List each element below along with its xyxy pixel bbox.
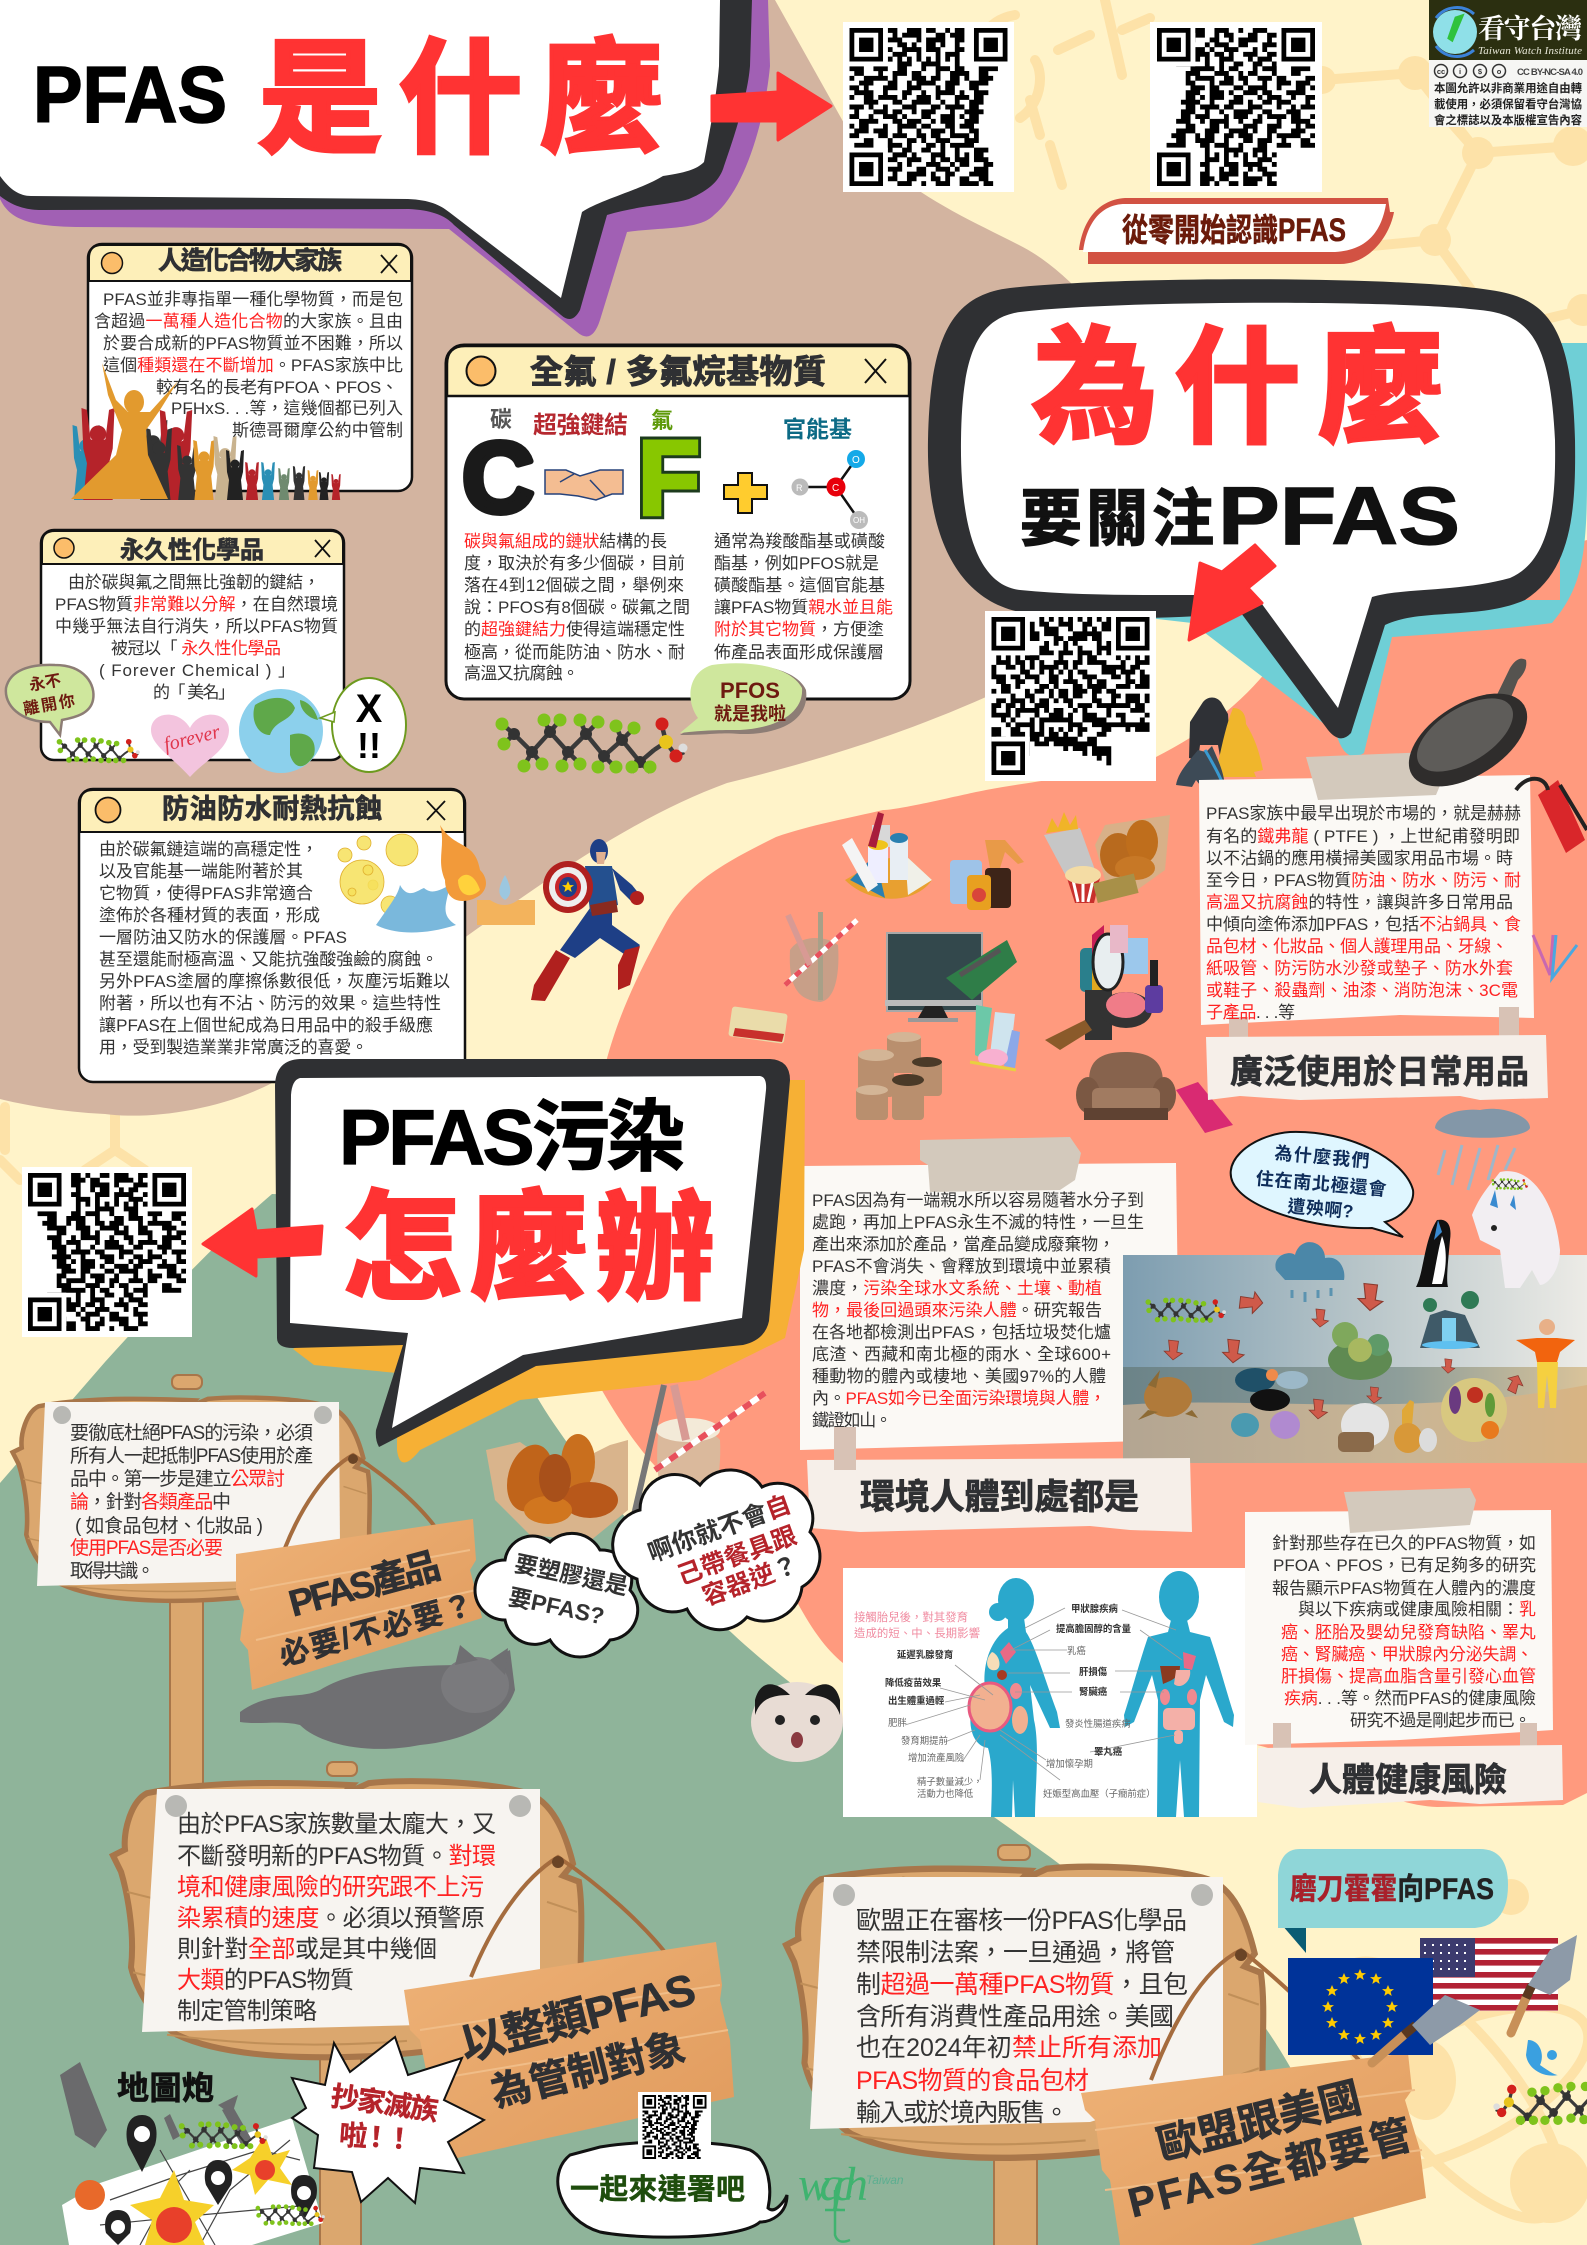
- paper body text: 與以下疾病或健康風險相關：乳: [1298, 1600, 1536, 1619]
- sign body text: 含所有消費性產品用途。美國: [856, 2003, 1174, 2031]
- left column text: 落在4到12個碳之間，舉例來: [464, 576, 684, 595]
- speech bubble: 為什麼 要關注PFAS: [928, 279, 1587, 756]
- diagram: carbon fluorine bond: [462, 407, 868, 537]
- label: 地圖炮: 地圖炮: [117, 2070, 214, 2106]
- right column text: 讓PFAS物質親水並且能: [714, 597, 893, 617]
- sign body text: [70, 1422, 313, 1582]
- label: 廣泛使用於日常用品: [1206, 1035, 1548, 1100]
- sign body text: 使用PFAS是否必要: [70, 1537, 223, 1559]
- sign: 要徹底杜絕: [13, 1398, 371, 1601]
- starburst: 抄家滅族啦: [292, 2037, 484, 2203]
- human body health figure: 肝損傷: [1079, 1666, 1108, 1677]
- sign: 歐盟正在審核: [786, 1867, 1265, 2158]
- speech bubble: 永不離開你: [6, 665, 93, 735]
- paper body text: 有名的鐵弗龍 ( PTFE ) ，上世紀甫發明即: [1206, 827, 1520, 846]
- figure labels: 造成的短、中、長期影響: [854, 1626, 980, 1640]
- icon: sofa: [1076, 1052, 1176, 1120]
- signpost: third post: [994, 1845, 1037, 2245]
- paper body text: 子產品. . .等: [1206, 1003, 1295, 1022]
- map with bombs: [60, 2062, 325, 2245]
- logo: Taiwan Watch Institute with licence: 本圖允許以非商業用途自由轉: [1434, 81, 1583, 95]
- thought cloud: 要塑膠還是要PFAS: 要PFAS?: [506, 1584, 607, 1629]
- panel body text: 由於碳與氟之間無比強韌的鍵結，: [68, 573, 320, 592]
- speech bubble: 永不離開你: 離開你: [22, 692, 76, 718]
- hanging sign: 歐盟跟美國PFAS全都要管: PFAS全都要管: [1123, 2112, 1416, 2226]
- icon: molecule: [1145, 1298, 1226, 1323]
- paper body text: 內。PFAS如今已全面污染環境與人體，: [812, 1389, 1106, 1408]
- paper body text: PFAS家族中最早出現於市場的，就是赫赫: [1206, 804, 1521, 823]
- arrow: to third QR: [1189, 545, 1275, 640]
- panel body text: [94, 290, 403, 440]
- paper body text: 種動物的體內或棲地、美國97%的人體: [812, 1367, 1106, 1386]
- icon: forever heart: forever: [162, 721, 222, 756]
- speech bubble: 為什麼我們住在南北極還會遭殃啊: 住在南北極還會: [1255, 1167, 1387, 1200]
- panel body text: PFAS物質非常難以分解，在自然環境: [55, 595, 338, 614]
- icon: rain cloud: [1435, 1109, 1530, 1190]
- icon: small molecule: [57, 737, 140, 763]
- icon: rain gear and shoes: [1176, 698, 1263, 787]
- speech bubble: X!!: !!: [357, 725, 381, 766]
- panel body text: 被冠以「 永久性化學品: [111, 639, 281, 658]
- sign body text: 境和健康風險的研究跟不上污: [177, 1874, 484, 1901]
- human body health figure: 肥胖: [888, 1717, 907, 1728]
- sign body text: 品中。第一步是建立公眾討: [70, 1468, 285, 1490]
- panel body text: PFAS並非專指單一種化學物質，而是包: [103, 290, 403, 309]
- speech bubble: PFAS 是什麼: [0, 0, 770, 336]
- sign body text: 所有人一起抵制PFAS使用於產: [70, 1445, 313, 1467]
- human body health figure: 甲狀腺疾病: [1071, 1603, 1119, 1614]
- title: 是什麼: [258, 31, 663, 169]
- speech bubble: 為什麼我們住在南北極還會遭殃啊: [1231, 1132, 1413, 1237]
- logo: Taiwan Watch Institute with licence: CC BY-NC-SA 4.0: [1517, 67, 1583, 78]
- left column text: 說：PFOS有8個碳。碳氟之間: [464, 598, 690, 617]
- logo: watch Taiwan: [798, 2158, 904, 2242]
- human body health figure: 出生體重過輕: [888, 1695, 945, 1706]
- starburst: 抄家滅族啦: 啦！！: [338, 2118, 414, 2156]
- paper body text: 疾病. . .等。然而PFAS的健康風險: [1284, 1689, 1536, 1708]
- paper body text: 癌、腎臟癌、甲狀腺內分泌失調、: [1281, 1645, 1533, 1664]
- sign body text: [177, 1811, 496, 2025]
- human body health figure: 妊娠型高血壓（子癇前症）: [1043, 1788, 1156, 1799]
- logo: Taiwan Watch Institute with licence: 看守台灣: [1478, 7, 1583, 46]
- sign body text: PFAS物質的食品包材: [856, 2067, 1089, 2095]
- diagram: carbon fluorine bond: 碳: [490, 407, 512, 432]
- icon: Captain America: [531, 839, 644, 1001]
- sign body text: [856, 1907, 1188, 2127]
- sign body text: 染累積的速度。必須以預警原: [177, 1905, 485, 1932]
- paper body text: 針對那些存在已久的PFAS物質，如: [1272, 1534, 1536, 1553]
- icon: sea creatures: [1231, 1368, 1308, 1439]
- label: 從零開始認識PFAS: 從零開始認識PFAS: [1122, 212, 1346, 248]
- QR code 4: [22, 1167, 192, 1337]
- heading: PFAS: [1218, 471, 1460, 562]
- diagram: carbon fluorine bond: O: [852, 455, 860, 466]
- heading: 要關注: [1020, 485, 1214, 554]
- hanging sign: PFAS產品必要/不必要: 必要/不必要？: [276, 1589, 477, 1672]
- right column text: 佈產品表面形成保護層: [714, 643, 884, 662]
- panel body text: 它物質，使得PFAS非常適合: [99, 883, 313, 903]
- label: 人體健康風險: 人體健康風險: [1309, 1761, 1507, 1798]
- speech bubble: 磨刀霍霍向PFAS: [1278, 1849, 1508, 1953]
- leader lines: [905, 1608, 1182, 1780]
- icon: earth: [239, 689, 323, 773]
- icon: forever heart: [151, 715, 229, 777]
- figure: pregnant woman: [969, 1578, 1060, 1817]
- sign body text: 禁限制法案，一旦通過，將管: [856, 1939, 1175, 1967]
- panel body text: 由於碳氟鏈這端的高穩定性，: [99, 839, 318, 859]
- hanging sign: PFAS產品必要/不必要: PFAS產品: [284, 1545, 445, 1624]
- speech bubble: PFAS污染 怎麼辦: [275, 1059, 805, 1462]
- icon: fire extinguisher: [1516, 779, 1587, 853]
- logo: Taiwan Watch Institute with licence: $: [1478, 67, 1483, 76]
- human body health figure: 睪丸癌: [1094, 1746, 1123, 1757]
- human body health figure: 腎臟癌: [1079, 1686, 1108, 1697]
- icon: meme cat: [751, 1682, 843, 1762]
- hanging sign: PFAS產品必要/不必要: [236, 1454, 482, 1690]
- speech bubble: PFOS 就是我啦: [680, 663, 806, 735]
- diagram: carbon fluorine bond: R: [796, 483, 803, 493]
- icon: PFOS molecule: [496, 714, 688, 774]
- signpost: second post: [320, 1762, 361, 2245]
- human body health figure: 乳癌: [1067, 1645, 1086, 1656]
- icon: bubble tea: [785, 912, 857, 1002]
- panel body text: 以及官能基一端能附著於其: [99, 862, 303, 881]
- paper body text: [1206, 804, 1521, 1022]
- paper body text: PFOA、PFOS，已有足夠多的研究: [1273, 1556, 1536, 1575]
- icon: tree island: [1328, 1322, 1392, 1380]
- icon: spray bottles: [950, 840, 1024, 910]
- paper body text: 至今日，PFAS物質防油、防水、防污、耐: [1206, 871, 1521, 890]
- paper body text: PFAS因為有一端親水所以容易隨著水分子到: [812, 1191, 1144, 1210]
- icon: frying pan: [1393, 659, 1543, 806]
- logo: Taiwan Watch Institute with licence: [1429, 0, 1587, 127]
- panel: 防油防水耐熱抗蝕: [79, 789, 465, 1082]
- diagram: carbon fluorine bond: C: [832, 483, 839, 494]
- QR code 3: [985, 611, 1156, 781]
- icon: fast food: [1044, 812, 1170, 903]
- paper body text: 產出來添加於產品，當產品變成廢棄物，: [812, 1235, 1115, 1254]
- arrow: to fourth QR: [203, 1209, 322, 1276]
- panel body text: 於要合成新的PFAS物質並不困難，所以: [103, 334, 403, 353]
- icon: waterfall rocks: [1420, 1291, 1480, 1349]
- thought cloud: 啊你就不會自己帶餐具跟容器逆: 啊你就不會自: [644, 1490, 795, 1568]
- icon: land animals: [1338, 1400, 1437, 1453]
- icon group: everyday products: [728, 812, 1233, 1133]
- icon: bombs: [60, 2062, 252, 2148]
- label: 環境人體到處都是: 環境人體到處都是: [860, 1478, 1139, 1517]
- panel heading: 人造化合物大家族: [158, 247, 342, 275]
- QR code 2: [1150, 22, 1322, 192]
- icon: vegetable circle: [1441, 1378, 1507, 1442]
- speech bubble: 為什麼我們住在南北極還會遭殃啊: 遭殃啊?: [1287, 1196, 1354, 1222]
- icon: EU flag: [1288, 1958, 1433, 2055]
- logo: Taiwan Watch Institute with licence: 載使用，必須保留看守台灣協: [1434, 97, 1582, 111]
- paper body text: 或鞋子、殺蟲劑、油漆、消防泡沫、3C電: [1206, 981, 1518, 1000]
- sign body text: 取得共識。: [70, 1560, 155, 1582]
- icon: woman shrugging: [1516, 1319, 1575, 1408]
- paper body text: 物，最後回過頭來污染人體。研究報告: [812, 1301, 1102, 1320]
- thought cloud: 要塑膠還是要PFAS: 要塑膠還是: [512, 1550, 630, 1600]
- speech bubble: 磨刀霍霍向PFAS: 磨刀霍霍向PFAS: [1290, 1873, 1494, 1906]
- logo: watch Taiwan: Taiwan: [866, 2173, 904, 2187]
- speech bubble: PFOS 就是我啦: PFOS: [720, 678, 780, 703]
- icon: water droplets: [1526, 2040, 1558, 2076]
- icon: turtle: [1138, 1370, 1198, 1420]
- panel body text: [55, 573, 338, 702]
- human body health figure: 發炎性腸道疾病: [1065, 1718, 1131, 1729]
- sign body text: 制超過一萬種PFAS物質，且包: [856, 1971, 1188, 1999]
- paper body text: 底渣、西藏和南北極的雨水、全球600+: [812, 1345, 1111, 1364]
- human body health figure: 精子數量減少，: [917, 1776, 983, 1787]
- icon: flow arrows: [1164, 1284, 1526, 1419]
- sign body text: 由於PFAS家族數量太龐大，又: [177, 1811, 496, 1838]
- panel body text: 讓PFAS在上個世紀成為日用品中的殺手級應: [99, 1015, 433, 1035]
- panel body text: 一層防油又防水的保護層。PFAS: [99, 928, 347, 947]
- panel body text: ( Forever Chemical ) 」: [99, 661, 295, 680]
- figure labels: 接觸胎兒後，對其發育: [854, 1610, 968, 1624]
- hanging sign: 以整類PFAS為管制對象: 為管制對象: [487, 2025, 690, 2116]
- heading: PFAS污染: [339, 1093, 685, 1181]
- sign body text: 輸入或於境內販售。: [856, 2099, 1069, 2127]
- right column text: [714, 532, 893, 662]
- right column text: 酯基，例如PFOS就是: [714, 554, 879, 573]
- icon: fire and brick: [440, 825, 535, 925]
- panel: 全氟/多氟烷基物質: [446, 345, 910, 699]
- panel body text: PFHxS. . .等，這幾個都已列入: [171, 398, 403, 418]
- logo: Taiwan Watch Institute with licence: cc: [1437, 67, 1445, 76]
- panel body text: 含超過一萬種人造化合物的大家族。且由: [94, 312, 403, 331]
- paper body text: [812, 1191, 1144, 1430]
- sign body text: 則針對全部或是其中幾個: [177, 1936, 437, 1963]
- heading: 怎麼辦: [343, 1183, 714, 1315]
- paper: PFAS in products: [1199, 752, 1534, 1045]
- sign body text: 大類的PFAS物質: [177, 1967, 354, 1994]
- paper body text: 中傾向塗佈添加PFAS，包括不沾鍋具、食: [1206, 915, 1521, 934]
- paper body text: 肝損傷、提高血脂含量引發心血管: [1281, 1667, 1536, 1686]
- panel: 永久性化學品: [41, 530, 344, 760]
- icon: map pins: [105, 2115, 317, 2245]
- label: 從零開始認識PFAS: [1079, 198, 1394, 264]
- diagram: carbon fluorine bond: OH: [853, 516, 865, 525]
- left column text: [464, 532, 690, 683]
- human body health figure: 增加流產風險: [908, 1752, 965, 1763]
- icon: blue cloud and drops: [1275, 1242, 1344, 1302]
- icon: cosmetic tubes: [970, 1005, 1020, 1070]
- starburst: 抄家滅族啦: 抄家滅族: [329, 2081, 440, 2126]
- label: 廣泛使用於日常用品: 廣泛使用於日常用品: [1230, 1053, 1529, 1090]
- human body health figure: 降低疫苗效果: [885, 1677, 942, 1688]
- figure: man: [1124, 1571, 1234, 1817]
- label: 人體健康風險: [1258, 1745, 1563, 1808]
- thought cloud: 啊你就不會自己帶餐具跟容器逆: 容器逆？: [698, 1550, 802, 1611]
- paper body text: 紙吸管、防污防水沙發或墊子、防水外套: [1206, 959, 1513, 978]
- figure labels: [854, 1610, 980, 1640]
- right column text: 通常為羧酸酯基或磺酸: [714, 532, 885, 551]
- hanging sign: 歐盟跟美國PFAS全都要管: 歐盟跟美國: [1153, 2074, 1366, 2169]
- panel body text: 用，受到製造業業非常廣泛的喜愛。: [99, 1038, 368, 1057]
- icon: gray cat lying: [240, 1645, 515, 1749]
- icon: cosmetics: [1045, 925, 1163, 1050]
- panel body text: [99, 839, 450, 1057]
- title: PFAS: [33, 50, 227, 139]
- panel body text: 中幾乎無法自行消失，所以PFAS物質: [55, 617, 338, 636]
- thought cloud: 啊你就不會自己帶餐具跟容器逆: 己帶餐具跟: [673, 1521, 801, 1591]
- QR code 5: [638, 2092, 711, 2162]
- left column text: 極高，從而能防油、防水、耐: [464, 643, 685, 662]
- panel body text: 另外PFAS塗層的摩擦係數很低，灰塵污垢難以: [99, 971, 450, 991]
- sign body text: 制定管制策略: [177, 1998, 317, 2025]
- paper body text: 高溫又抗腐蝕的特性，讓與許多日常用品: [1206, 892, 1513, 912]
- right column text: 磺酸酯基。這個官能基: [714, 575, 885, 595]
- diagram: carbon fluorine bond: 氟: [651, 408, 673, 433]
- icon: fried chicken: [486, 1434, 628, 1541]
- icon: molecule bottom right: [1493, 2082, 1587, 2125]
- thought cloud: 啊你就不會自己帶餐具跟容器逆: [613, 1470, 820, 1630]
- sign body text: 歐盟正在審核一份PFAS化學品: [856, 1907, 1187, 1935]
- sign body text: ( 如食品包材、化妝品 ): [75, 1515, 263, 1537]
- panel heading: 永久性化學品: [120, 537, 264, 564]
- logo: Taiwan Watch Institute with licence: Taiwan Watch Institute: [1478, 45, 1582, 57]
- paper: PFAS in environment: [800, 1137, 1180, 1450]
- label: 環境人體到處都是: [807, 1427, 1192, 1532]
- icon: dental floss picks: [1533, 935, 1577, 978]
- paper body text: PFAS不會消失、會釋放到環境中並累積: [812, 1257, 1111, 1276]
- hanging sign: 以整類PFAS為管制對象: [404, 1856, 734, 2160]
- panel body text: 附著，所以也有不沾、防污的效果。這些特性: [99, 993, 441, 1013]
- paper body text: 報告顯示PFAS物質在人體內的濃度: [1272, 1579, 1536, 1598]
- icon: instant noodles pack: [728, 1006, 788, 1044]
- left column text: 高溫又抗腐蝕。: [464, 664, 579, 683]
- paper body text: 癌、胚胎及嬰幼兒發育缺陷、睪丸: [1281, 1623, 1536, 1642]
- human body health figure: 發育期提前: [901, 1735, 948, 1746]
- paper body text: 在各地都檢測出PFAS，包括垃圾焚化爐: [812, 1323, 1111, 1342]
- logo: Taiwan Watch Institute with licence: i: [1459, 67, 1461, 76]
- human body health figure: [843, 1568, 1257, 1817]
- panel body text: 這個種類還在不斷增加。PFAS家族中比: [103, 355, 403, 375]
- diagram: carbon fluorine bond: F: [638, 419, 700, 537]
- arrow: to first QR: [712, 73, 831, 140]
- speech bubble: X!!: X: [356, 687, 383, 731]
- sign body text: 論，針對各類產品中: [70, 1491, 231, 1513]
- panel body text: 甚至還能耐極高溫、又能抗強酸強鹼的腐蝕。: [99, 950, 438, 969]
- heading: [1020, 318, 1460, 562]
- hanging sign: 歐盟跟美國PFAS全都要管: [1081, 1949, 1426, 2245]
- paper body text: 處跑，再加上PFAS永生不滅的特性，一旦生: [812, 1213, 1144, 1232]
- icon: polar bear: [1472, 1171, 1560, 1288]
- left column text: 的超強鍵結力使得這端穩定性: [464, 619, 685, 639]
- sign body text: 也在2024年初禁止所有添加: [856, 2034, 1162, 2062]
- logo: Taiwan Watch Institute with licence: o: [1497, 67, 1502, 76]
- right column text: 附於其它物質，方便塗: [714, 620, 884, 639]
- paper: health risk: [1245, 1488, 1553, 1759]
- left column text: 碳與氟組成的鏈狀結構的長: [464, 532, 667, 551]
- diagram: carbon fluorine bond: F: [638, 419, 700, 537]
- QR code 1: [843, 22, 1014, 192]
- logo: Taiwan Watch Institute with licence: 會之標誌以及本版權宣告內容: [1434, 113, 1583, 127]
- paper body text: 以不沾鍋的應用橫掃美國家用品市場。時: [1206, 848, 1513, 868]
- icon: crowd silhouettes: [71, 363, 341, 500]
- icon: paper food cups: [856, 1032, 942, 1120]
- icon: penguin: [1416, 1220, 1450, 1287]
- human body health figure: 提高膽固醇的含量: [1056, 1623, 1131, 1634]
- icon: oil bubbles and water splash: [338, 834, 456, 932]
- panel heading: 防油防水耐熱抗蝕: [162, 794, 382, 824]
- icon: bubble tea with straws: [634, 1385, 765, 1517]
- sign body text: 不斷發明新的PFAS物質。對環: [177, 1843, 496, 1870]
- speech bubble: 一起來連署吧: [558, 2142, 787, 2237]
- icon: monitor and circuit board: [885, 933, 1017, 1022]
- icon: explosions: [75, 2135, 292, 2245]
- speech bubble: 為什麼我們住在南北極還會遭殃啊: 為什麼我們: [1274, 1142, 1370, 1171]
- panel body text: 的「 美名」: [153, 683, 235, 702]
- panel body text: 較有名的長老有PFOA、PFOS、: [156, 378, 398, 397]
- heading: [339, 1093, 714, 1315]
- icon: paint: [842, 812, 932, 899]
- paper body text: 鐵證如山。: [812, 1411, 892, 1430]
- hanging sign: 以整類PFAS為管制對象: 以整類PFAS: [456, 1965, 700, 2071]
- diagram: carbon fluorine bond: C: [462, 422, 534, 534]
- logo: watch Taiwan: wqch: [798, 2158, 868, 2211]
- panel body text: 斯德哥爾摩公約中管制: [232, 421, 403, 440]
- beach picture: PFAS water cycle: [1123, 1242, 1587, 1463]
- paper body text: [1272, 1534, 1536, 1730]
- speech bubble: 永不離開你: 永不: [28, 671, 62, 695]
- paper body text: 濃度，污染全球水文系統、土壤、動植: [812, 1278, 1102, 1298]
- signpost: first post: [170, 1375, 203, 1790]
- heading: 為什麼: [1032, 318, 1443, 459]
- panel heading: 全氟 / 多氟烷基物質: [530, 353, 826, 390]
- icon: knives: [1372, 1935, 1577, 2063]
- paper body text: 研究不過是剛起步而已。: [1350, 1711, 1531, 1730]
- thought cloud: 要塑膠還是要PFAS: [475, 1533, 638, 1657]
- sign: 由於PFAS家族: [113, 1781, 583, 2057]
- human body health figure: 活動力也降低: [917, 1788, 974, 1799]
- speech bubble: X!!: [320, 678, 406, 772]
- human body health figure: 增加懷孕期: [1046, 1758, 1093, 1769]
- icon: USA flag: [1420, 1938, 1558, 2011]
- left column text: 度，取決於有多少個碳，目前: [464, 554, 685, 573]
- paper body text: 品包材、化妝品、個人護理用品、牙線、: [1206, 937, 1508, 956]
- panel body text: 塗佈於各種材質的表面，形成: [99, 906, 320, 925]
- icon: rolled cushion: [1176, 1082, 1233, 1133]
- speech bubble: 一起來連署吧: 一起來連署吧: [570, 2173, 745, 2206]
- title: [33, 31, 663, 169]
- icon: molecules on map: [179, 2121, 268, 2149]
- diagram: carbon fluorine bond: 官能基: [783, 416, 852, 442]
- speech bubble: PFOS 就是我啦: 就是我啦: [714, 703, 786, 724]
- panel: 人造化合物大家族: [88, 244, 412, 491]
- human body health figure: 延遲乳腺發育: [897, 1649, 953, 1660]
- sign body text: 要徹底杜絕PFAS的污染，必須: [70, 1422, 313, 1444]
- diagram: carbon fluorine bond: 超強鍵結: [533, 412, 628, 439]
